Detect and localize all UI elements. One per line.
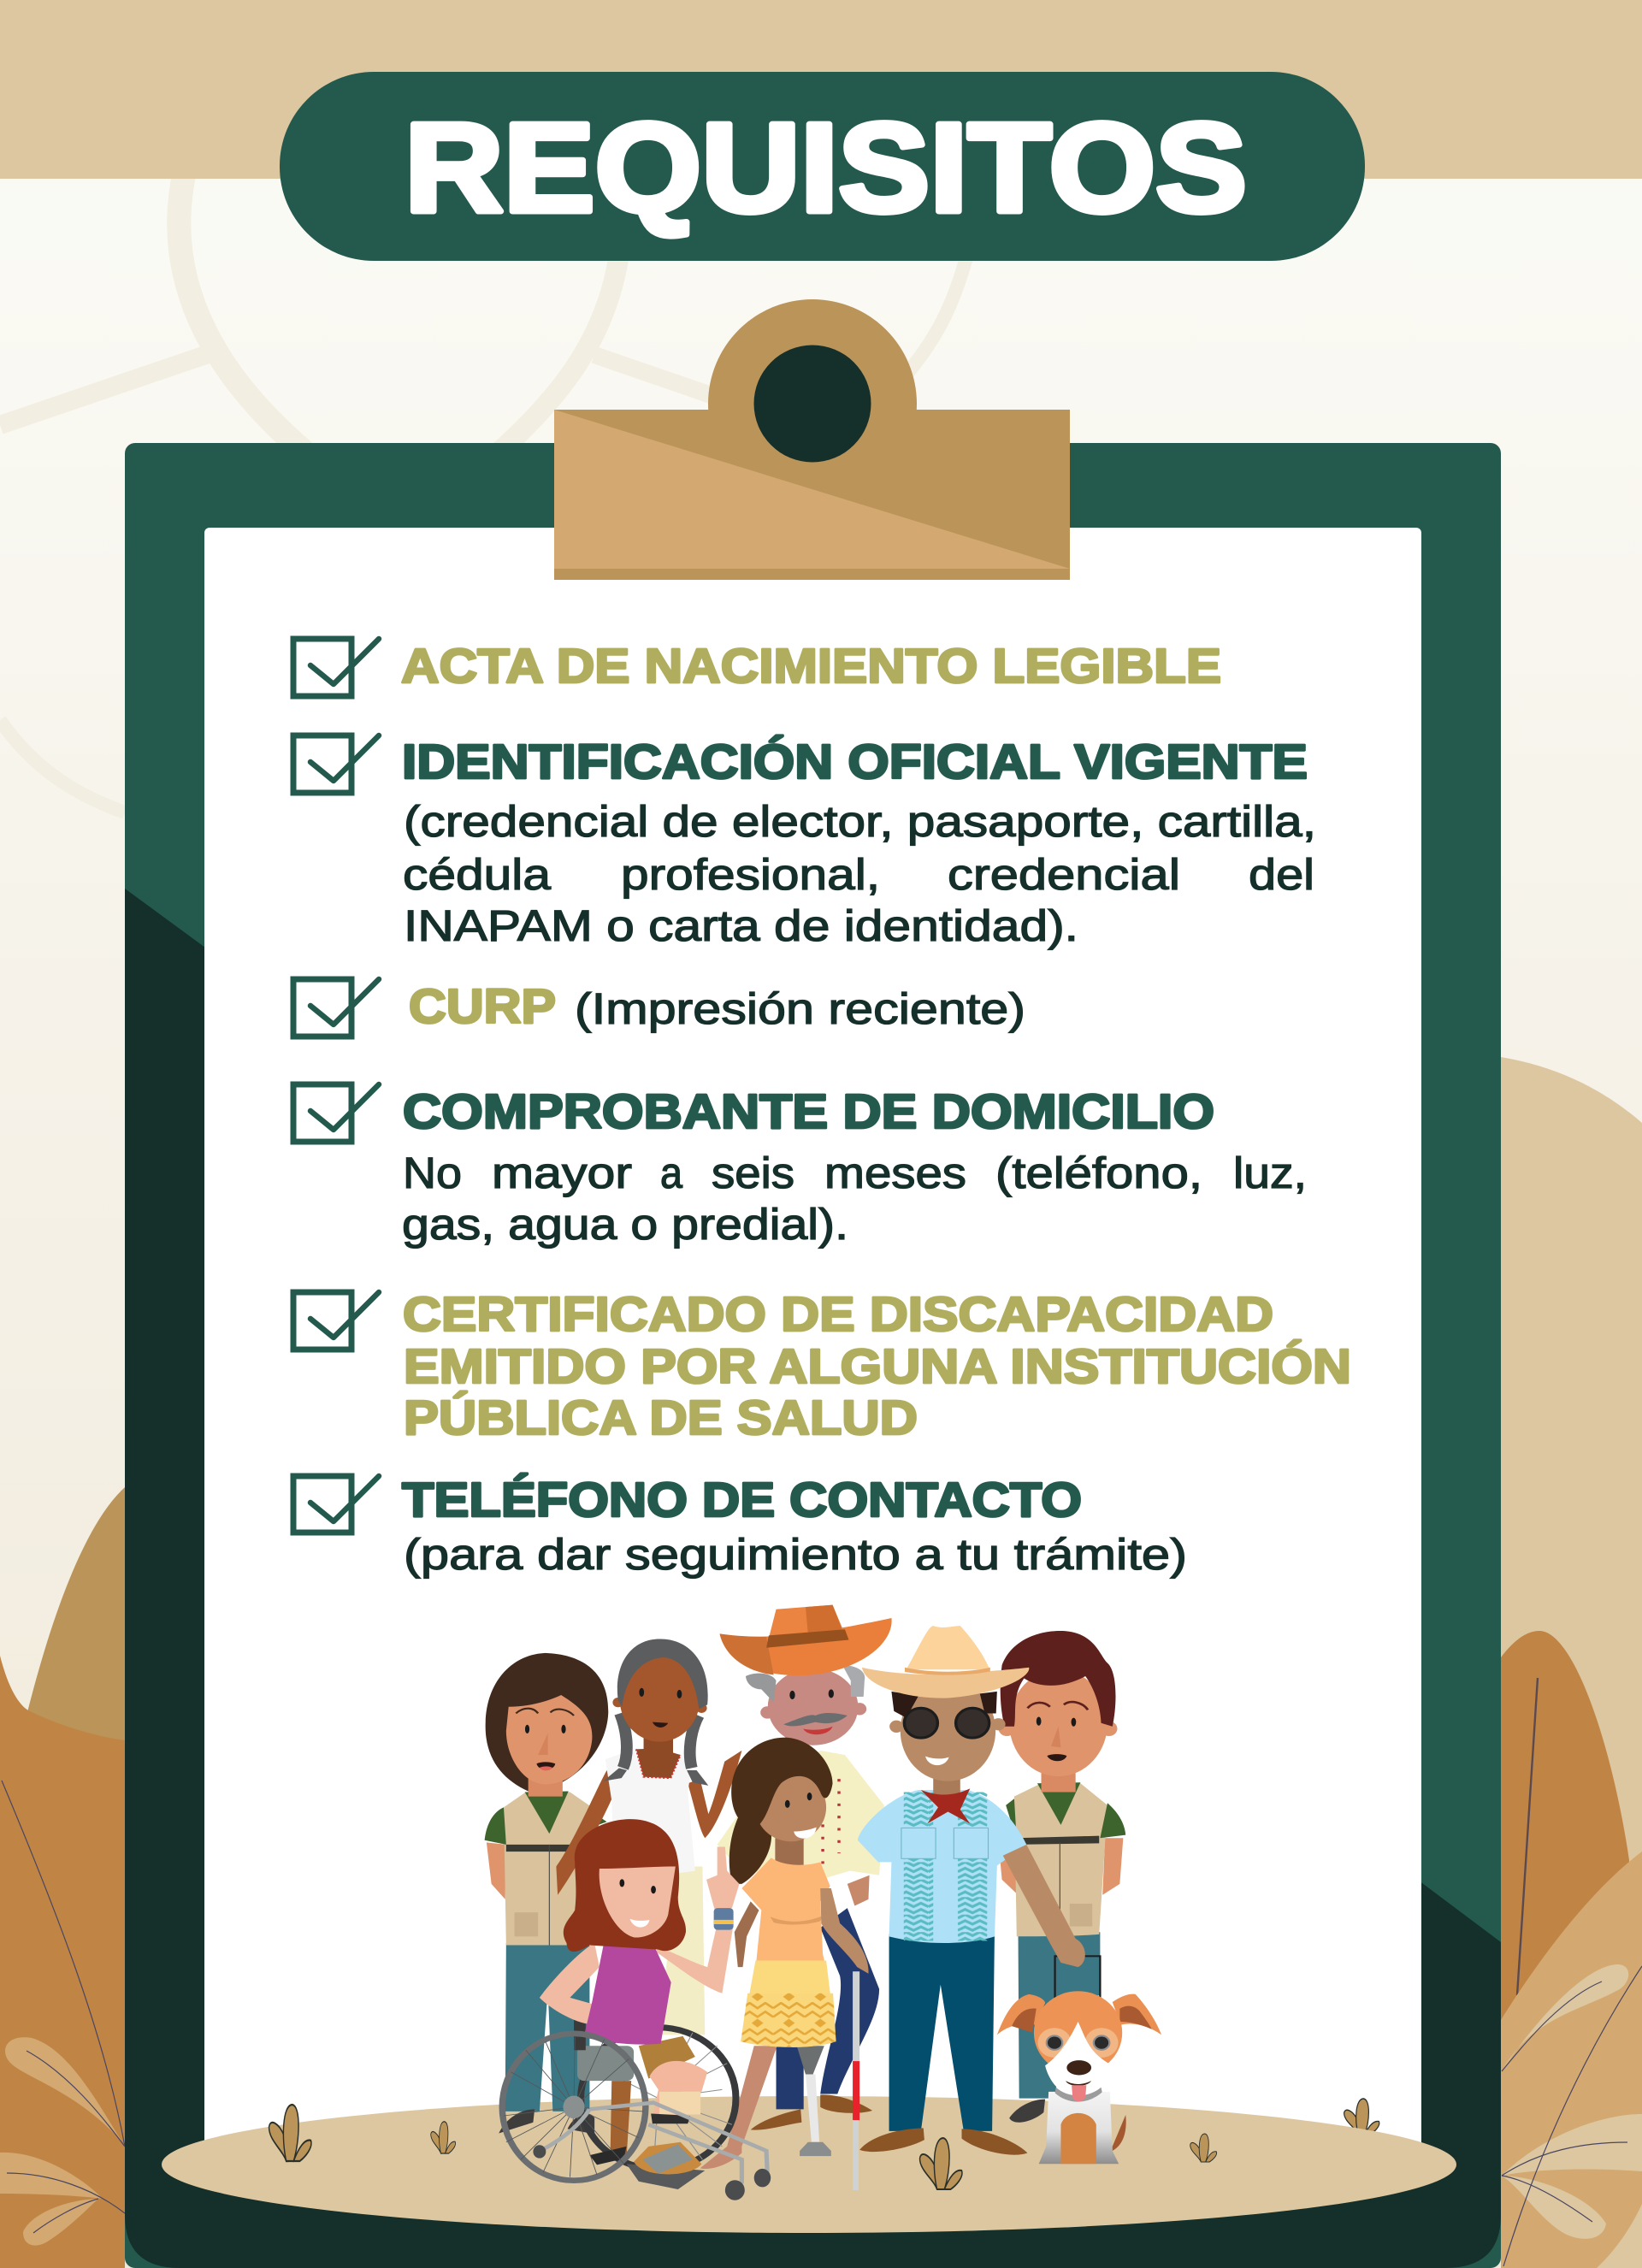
description 4: luz, xyxy=(1233,1149,1307,1197)
description 4 xyxy=(402,1149,1307,1249)
requirement 3: curp xyxy=(293,979,1025,1037)
heading 5 xyxy=(403,1287,1351,1445)
icon: checkbox 2 xyxy=(293,735,379,793)
description 6: (para dar seguimiento a tu trámite) xyxy=(404,1530,1187,1579)
description 4: mayor xyxy=(492,1149,632,1197)
right plant xyxy=(1501,1631,1642,2268)
description 4: a xyxy=(660,1149,683,1197)
description 2: (credencial de elector, pasaporte, cartilla, xyxy=(404,797,1316,846)
heading 5: CERTIFICADO DE DISCAPACIDAD xyxy=(403,1287,1273,1342)
icon: checkbox 6 xyxy=(293,1476,379,1533)
icon: checkbox 4 xyxy=(293,1084,379,1142)
background leaf outlines xyxy=(0,171,969,812)
ground sprouts xyxy=(269,2105,1217,2189)
requirement 6: telefono de contacto xyxy=(293,1473,1187,1579)
clip hole xyxy=(754,346,871,462)
title pill xyxy=(280,72,1365,261)
requirement 5: certificado de discapacidad xyxy=(293,1287,1351,1445)
sprout behind ground xyxy=(1344,2099,1379,2135)
requirement 4: comprobante de domicilio xyxy=(293,1084,1307,1249)
white cane xyxy=(853,1971,859,2190)
description 2: profesional, xyxy=(621,850,880,899)
right hill xyxy=(1501,1057,1642,2268)
person: right man in vest xyxy=(999,1631,1125,2123)
paper sheet xyxy=(204,528,1421,2165)
top band xyxy=(0,0,1642,179)
description 4: meses xyxy=(824,1149,966,1197)
ground xyxy=(162,2096,1456,2233)
description 4: gas, agua o predial). xyxy=(402,1200,848,1249)
requirement 1: acta de nacimiento xyxy=(293,639,1221,696)
heading 5: EMITIDO POR ALGUNA INSTITUCIÓN xyxy=(404,1339,1351,1394)
description 4: seis xyxy=(712,1149,794,1197)
description 3: (Impresión reciente) xyxy=(575,984,1025,1033)
person: woman with prosthetic leg xyxy=(700,1738,869,2169)
description 2: INAPAM o carta de identidad). xyxy=(404,901,1078,950)
description 2 xyxy=(403,797,1316,950)
description 2: del xyxy=(1249,850,1314,899)
left orange plant xyxy=(0,1656,125,2268)
heading 6: TELÉFONO DE CONTACTO xyxy=(402,1473,1082,1527)
heading 3: CURP xyxy=(409,979,556,1034)
rear wheel xyxy=(581,2028,735,2169)
person: woman in wheelchair xyxy=(502,1819,771,2200)
heading 1: ACTA DE NACIMIENTO LEGIBLE xyxy=(401,639,1221,694)
description 4: No xyxy=(403,1149,462,1197)
description 4: (teléfono, xyxy=(995,1149,1202,1197)
person: older man with orange hat xyxy=(718,1605,892,2130)
icon: checkbox 1 xyxy=(293,639,379,696)
dog xyxy=(997,1991,1161,2164)
description 2: cédula xyxy=(403,850,552,899)
person: woman in vest xyxy=(485,1653,608,2135)
icon: checkbox 5 xyxy=(293,1292,379,1350)
front wheel xyxy=(502,2034,646,2181)
requirement 2: identificacion oficial xyxy=(293,735,1316,950)
person: blind man with straw hat xyxy=(858,1626,1100,2155)
icon: checkbox 3 xyxy=(293,979,379,1037)
heading 5: PÚBLICA DE SALUD xyxy=(404,1391,918,1445)
chair frame xyxy=(540,2103,767,2183)
heading 2: IDENTIFICACIÓN OFICIAL VIGENTE xyxy=(402,735,1308,789)
clipboard clip xyxy=(554,299,1070,580)
title text: REQUISITOS xyxy=(405,97,1247,239)
clipboard board xyxy=(125,443,1501,2268)
description 2: credencial xyxy=(948,850,1180,899)
heading 4: COMPROBANTE DE DOMICILIO xyxy=(403,1084,1214,1139)
person: woman with braids xyxy=(556,1639,741,2035)
left hill xyxy=(26,1487,125,1762)
illustration: group of people xyxy=(485,1605,1161,2200)
